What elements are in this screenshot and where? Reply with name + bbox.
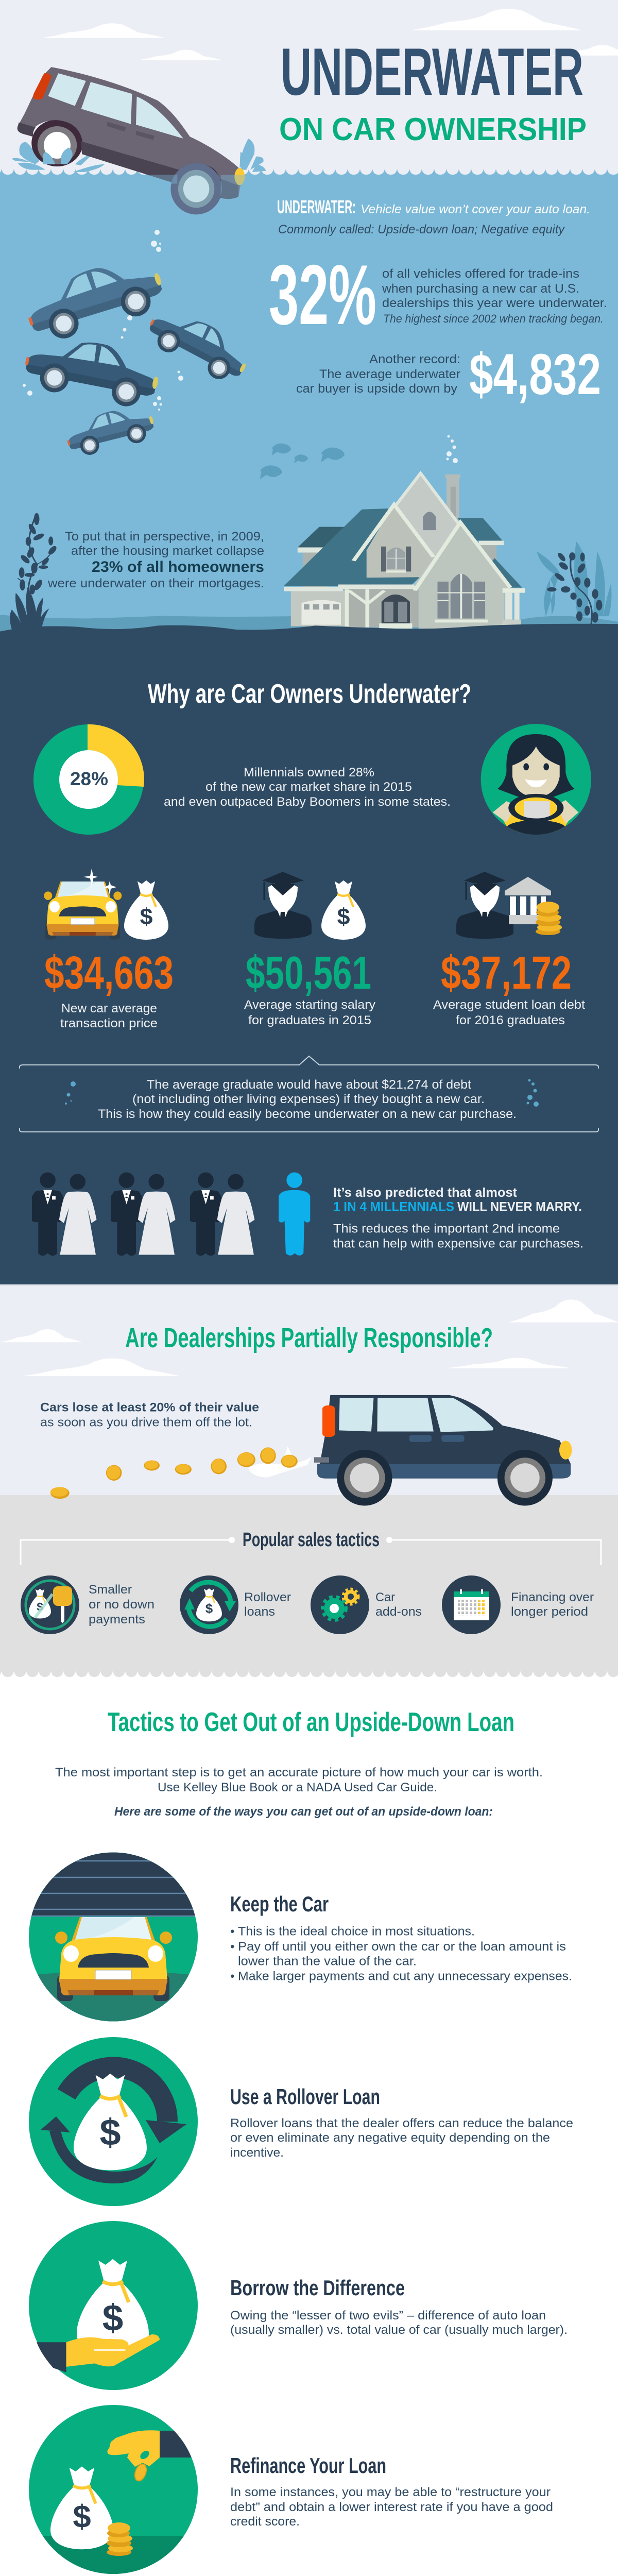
title: ON CAR OWNERSHIP — [279, 112, 587, 147]
section background: why are car owners underwater — [0, 624, 618, 1286]
stat: starting salary — [244, 872, 375, 1027]
illustration: car plunging into water — [12, 67, 266, 214]
text: keep the car: Pay off until you either own the car or the loan amount is — [238, 1940, 566, 1954]
stat: 32% — [269, 247, 607, 342]
millennials text: of the new car market share in 2015 — [205, 780, 412, 794]
icon: rollover loan — [29, 2037, 198, 2206]
donut chart: 28%: 28% — [70, 768, 108, 789]
section background: tactics — [0, 1679, 618, 2576]
tactic: smaller or no down payments: or no down — [89, 1598, 154, 1612]
text: keep the car: • — [230, 1970, 234, 1984]
homeowners text: To put that in perspective, in 2009, — [65, 530, 264, 544]
tactic: financing over longer period: Financing over — [511, 1590, 594, 1604]
marriage text: It’s also predicted that almost — [333, 1185, 518, 1200]
text: keep the car: This is the ideal choice in most situations. — [238, 1925, 475, 1938]
homeowners text: after the housing market collapse — [71, 544, 264, 558]
intro text: Here are some of the ways you can get out of an upside-down loan: — [114, 1805, 493, 1819]
millennials text — [164, 766, 451, 809]
stat: 32%: The highest since 2002 when tracking began. — [383, 312, 604, 325]
text: keep the car: Make larger payments and cut any unnecessary expenses. — [238, 1970, 572, 1984]
stat: new car price: $34,663 — [44, 947, 174, 999]
stat: student loan debt: Average student loan debt — [433, 998, 585, 1012]
callout: graduate debt: The average graduate would have about $21,274 of debt — [147, 1078, 471, 1092]
heading: popular sales tactics — [21, 1529, 601, 1565]
marriage text: 1 IN 4 MILLENNIALS — [333, 1199, 454, 1214]
tactic: rollover loans: Rollover — [244, 1590, 291, 1604]
text: borrow the difference — [230, 2276, 568, 2337]
stat: student loan debt: for 2016 graduates — [456, 1013, 565, 1027]
homeowners text: 23% of all homeowners — [92, 558, 264, 575]
stat: student loan debt — [433, 872, 585, 1027]
tactic: financing over longer period: longer period — [511, 1605, 588, 1619]
callout: graduate debt: (not including other living expenses) if they bought a new car. — [132, 1092, 485, 1106]
depreciation text: Cars lose at least 20% of their value — [40, 1400, 259, 1415]
icon: graduate and money bag — [254, 872, 366, 940]
callout: graduate debt: This is how they could easily become underwater on a new car purchase. — [98, 1107, 517, 1121]
tactic: car add-ons — [311, 1575, 422, 1634]
section background: water — [0, 169, 618, 633]
tactic: car add-ons: add-ons — [375, 1605, 422, 1619]
text: borrow the difference: Borrow the Difference — [230, 2276, 405, 2300]
bubbles — [23, 230, 458, 463]
heading: popular sales tactics: Popular sales tactics — [243, 1529, 380, 1551]
section background: sky — [0, 0, 618, 178]
stat: starting salary: for graduates in 2015 — [248, 1013, 371, 1027]
intro text: Use Kelley Blue Book or a NADA Used Car Guide. — [158, 1781, 437, 1794]
marriage text: This reduces the important 2nd income — [333, 1222, 560, 1236]
fish — [260, 444, 345, 479]
text: keep the car — [230, 1892, 572, 1984]
text: keep the car: • — [230, 1925, 234, 1938]
stat: new car price: transaction price — [60, 1016, 158, 1030]
pictogram: couples and one single person — [32, 1172, 310, 1256]
illustration: seaweed left — [10, 513, 58, 630]
icon: graduate, bank and coins — [456, 872, 562, 939]
callout: graduate debt — [20, 1056, 598, 1132]
stat: $4,832: car buyer is upside down by — [296, 382, 457, 396]
text: refinance your loan: In some instances, you may be able to “restructure your — [230, 2485, 551, 2499]
icon: woman driving — [481, 724, 591, 836]
definition text: Vehicle value won’t cover your auto loan. — [360, 202, 590, 216]
icon: refinance your loan — [29, 2405, 198, 2576]
sinking cars — [20, 251, 255, 460]
icon: keep the car — [29, 1853, 198, 2022]
text: rollover loan: Rollover loans that the dealer offers can reduce the balance — [230, 2116, 573, 2130]
stat: student loan debt: $37,172 — [441, 947, 572, 999]
stat: 32%: 32% — [269, 247, 376, 342]
text: keep the car: Keep the Car — [230, 1892, 329, 1916]
clouds — [41, 9, 618, 60]
marriage text: WILL NEVER MARRY. — [457, 1199, 582, 1214]
stat: new car price: New car average — [61, 1002, 157, 1015]
depreciation text — [40, 1400, 259, 1430]
text: borrow the difference: (usually smaller) vs. total value of car (usually much larger). — [230, 2323, 568, 2337]
stat: 32%: dealerships this year were underwater. — [382, 296, 607, 310]
tactic: smaller or no down payments — [21, 1575, 154, 1634]
millennials text: and even outpaced Baby Boomers in some states. — [164, 795, 451, 809]
stat: $4,832 — [296, 342, 601, 406]
marriage text — [333, 1185, 583, 1251]
text: refinance your loan — [230, 2453, 553, 2529]
icon: gears — [311, 1575, 369, 1634]
tactic: car add-ons: Car — [375, 1590, 395, 1604]
text: rollover loan — [230, 2084, 573, 2160]
tactic: smaller or no down payments: Smaller — [89, 1583, 132, 1597]
donut chart: 28% — [33, 724, 144, 835]
clouds — [0, 1299, 618, 1376]
illustration: car dropping coins — [50, 1395, 572, 1506]
section background: dealerships — [0, 1284, 618, 1496]
illustration: seaweed right — [537, 541, 611, 624]
intro text — [55, 1766, 543, 1819]
text: refinance your loan: credit score. — [230, 2515, 300, 2529]
intro text: The most important step is to get an accurate picture of how much your car is worth. — [55, 1766, 543, 1780]
section background: sales tactics — [0, 1495, 618, 1679]
seabed hills — [0, 615, 618, 641]
text: keep the car: lower than the value of the car. — [238, 1955, 417, 1969]
stat: new car price — [44, 869, 174, 1030]
text: borrow the difference: Owing the “lesser of two evils” – difference of auto loan — [230, 2309, 546, 2323]
text: refinance your loan: debt” and obtain a lower interest rate if you have a good — [230, 2500, 553, 2514]
text: rollover loan: Use a Rollover Loan — [230, 2084, 380, 2109]
homeowners text: were underwater on their mortgages. — [47, 577, 264, 590]
text: rollover loan: incentive. — [230, 2146, 284, 2160]
definition text: Commonly called: Upside-down loan; Negative equity — [278, 223, 565, 236]
stat: starting salary: $50,561 — [246, 947, 371, 999]
stat: 32%: of all vehicles offered for trade-ins — [382, 267, 579, 281]
stat: $4,832: Another record: — [369, 352, 460, 366]
tactic: rollover loans — [180, 1575, 291, 1634]
icon: rollover arrows — [180, 1575, 238, 1634]
stat: 32%: when purchasing a new car at U.S. — [382, 282, 579, 296]
title — [279, 34, 587, 147]
tactic: financing over longer period — [442, 1575, 594, 1634]
depreciation text: as soon as you drive them off the lot. — [40, 1416, 252, 1430]
illustration: submerged house — [284, 473, 525, 629]
icon: borrow the difference — [29, 2221, 198, 2390]
icon: new car — [44, 869, 168, 940]
icon: calendar — [442, 1575, 501, 1634]
marriage text: that can help with expensive car purchases. — [333, 1237, 583, 1251]
definition text — [277, 196, 590, 236]
definition text: UNDERWATER: — [277, 196, 356, 217]
text: keep the car: • — [230, 1940, 234, 1954]
icon: no money bag and key — [21, 1575, 79, 1634]
tactic: rollover loans: loans — [244, 1605, 275, 1619]
heading: why are car owners underwater: Why are Car Owners Underwater? — [148, 679, 471, 709]
homeowners text — [47, 530, 264, 590]
text: rollover loan: or even eliminate any negative equity depending on the — [230, 2131, 550, 2145]
stat: $4,832: The average underwater — [319, 367, 460, 381]
stat: starting salary: Average starting salary — [244, 998, 375, 1012]
millennials text: Millennials owned 28% — [244, 766, 374, 779]
tactic: smaller or no down payments: payments — [89, 1613, 145, 1626]
text: refinance your loan: Refinance Your Loan — [230, 2453, 386, 2478]
